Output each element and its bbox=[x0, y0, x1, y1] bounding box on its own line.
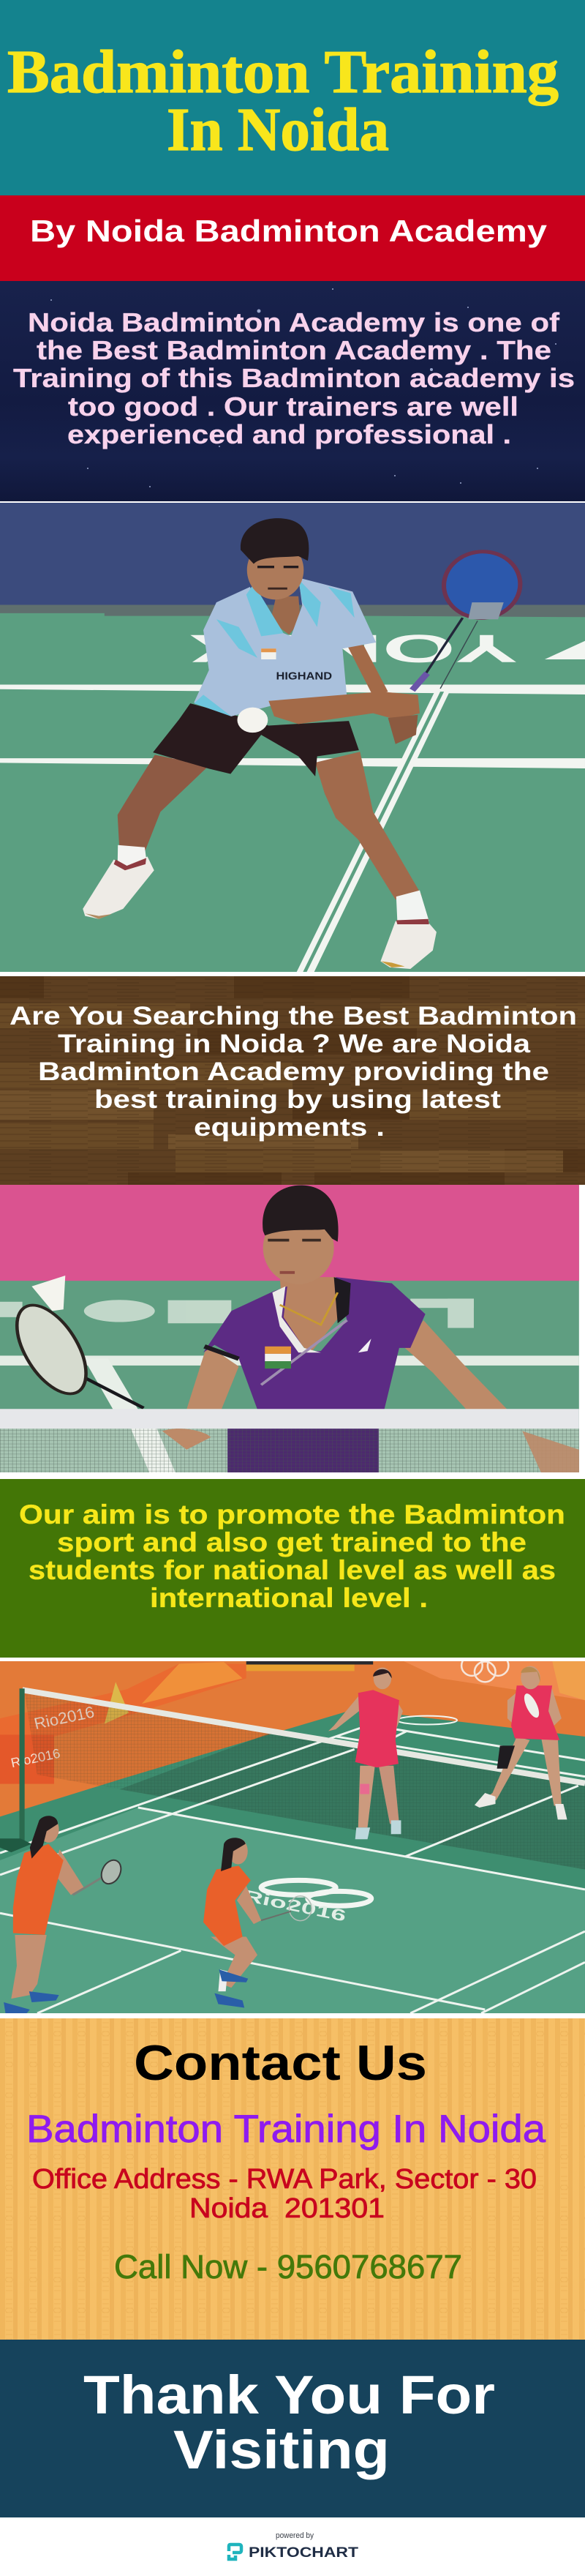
searching text: Badminton Academy providing the bbox=[38, 1057, 549, 1086]
footer: Piktochart credit: PIKTOCHART bbox=[249, 2545, 358, 2561]
player figure bbox=[186, 1186, 507, 1409]
searching text: Training in Noida ? We are Noida bbox=[58, 1030, 531, 1058]
photo: doubles match at Rio 2016: Rio2016 bbox=[32, 1703, 96, 1733]
photo: male badminton player: YONEX bbox=[189, 626, 518, 670]
player figure: HIGHAND bbox=[276, 671, 332, 682]
panel: academy introduction bbox=[0, 281, 585, 501]
closing message bbox=[83, 2365, 495, 2480]
panel: subtitle band bbox=[0, 195, 585, 281]
aim text bbox=[19, 1499, 565, 1613]
footer: Piktochart credit bbox=[229, 2531, 358, 2561]
icon: Piktochart logo bbox=[229, 2545, 241, 2559]
intro text bbox=[13, 307, 575, 449]
closing message: Visiting bbox=[173, 2419, 390, 2480]
racket and shuttlecock bbox=[3, 1276, 143, 1408]
intro text: Noida Badminton Academy is one of bbox=[28, 307, 560, 337]
title: Badminton Training bbox=[7, 38, 559, 106]
intro text: too good . Our trainers are well bbox=[68, 392, 518, 422]
title bbox=[7, 38, 559, 164]
panel: title banner bbox=[0, 0, 585, 195]
office address bbox=[32, 2164, 537, 2224]
phone number: Call Now - 9560768677 bbox=[114, 2248, 462, 2285]
orange player left bbox=[4, 1816, 124, 2014]
contact heading: Contact Us bbox=[134, 2035, 427, 2091]
panel: aim statement bbox=[0, 1479, 585, 1658]
Rio court logo bbox=[242, 1716, 457, 1925]
academy name: Badminton Training In Noida bbox=[26, 2108, 546, 2151]
searching text: Are You Searching the Best Badminton bbox=[10, 1002, 577, 1030]
title: In Noida bbox=[167, 96, 389, 164]
photo: male badminton player bbox=[0, 498, 585, 981]
aim text: sport and also get trained to the bbox=[57, 1527, 526, 1557]
searching text: equipments . bbox=[194, 1113, 385, 1142]
searching text bbox=[10, 1002, 577, 1142]
closing message: Thank You For bbox=[83, 2365, 495, 2425]
Olympic rings bbox=[461, 1661, 510, 1683]
office address: Noida 201301 bbox=[189, 2193, 385, 2224]
subtitle: By Noida Badminton Academy bbox=[30, 214, 548, 248]
panel: contact details bbox=[0, 2018, 585, 2340]
pink player right bbox=[475, 1666, 567, 1819]
pink player left bbox=[328, 1667, 403, 1839]
aim text: Our aim is to promote the Badminton bbox=[19, 1499, 565, 1530]
net bbox=[0, 1688, 585, 1852]
intro text: the Best Badminton Academy . The bbox=[37, 335, 551, 365]
player figure bbox=[83, 518, 528, 969]
panel: searching for training bbox=[0, 976, 585, 1185]
aim text: students for national level as well as bbox=[29, 1555, 556, 1585]
searching text: best training by using latest bbox=[94, 1085, 501, 1114]
footer: Piktochart credit: powered by bbox=[276, 2531, 314, 2540]
photo: doubles match at Rio 2016: Rio2016 bbox=[10, 1746, 61, 1770]
panel: thank you bbox=[0, 2340, 585, 2517]
aim text: international level . bbox=[150, 1583, 428, 1613]
office address: Office Address - RWA Park, Sector - 30 bbox=[32, 2164, 537, 2195]
intro text: Training of this Badminton academy is bbox=[13, 363, 575, 393]
Rio court logo: Rio2016 bbox=[242, 1886, 348, 1925]
photo: doubles match at Rio 2016 bbox=[0, 1655, 585, 2017]
orange player right bbox=[203, 1838, 312, 2008]
intro text: experienced and professional . bbox=[67, 419, 511, 449]
photo: female player at the net bbox=[0, 1182, 579, 1478]
